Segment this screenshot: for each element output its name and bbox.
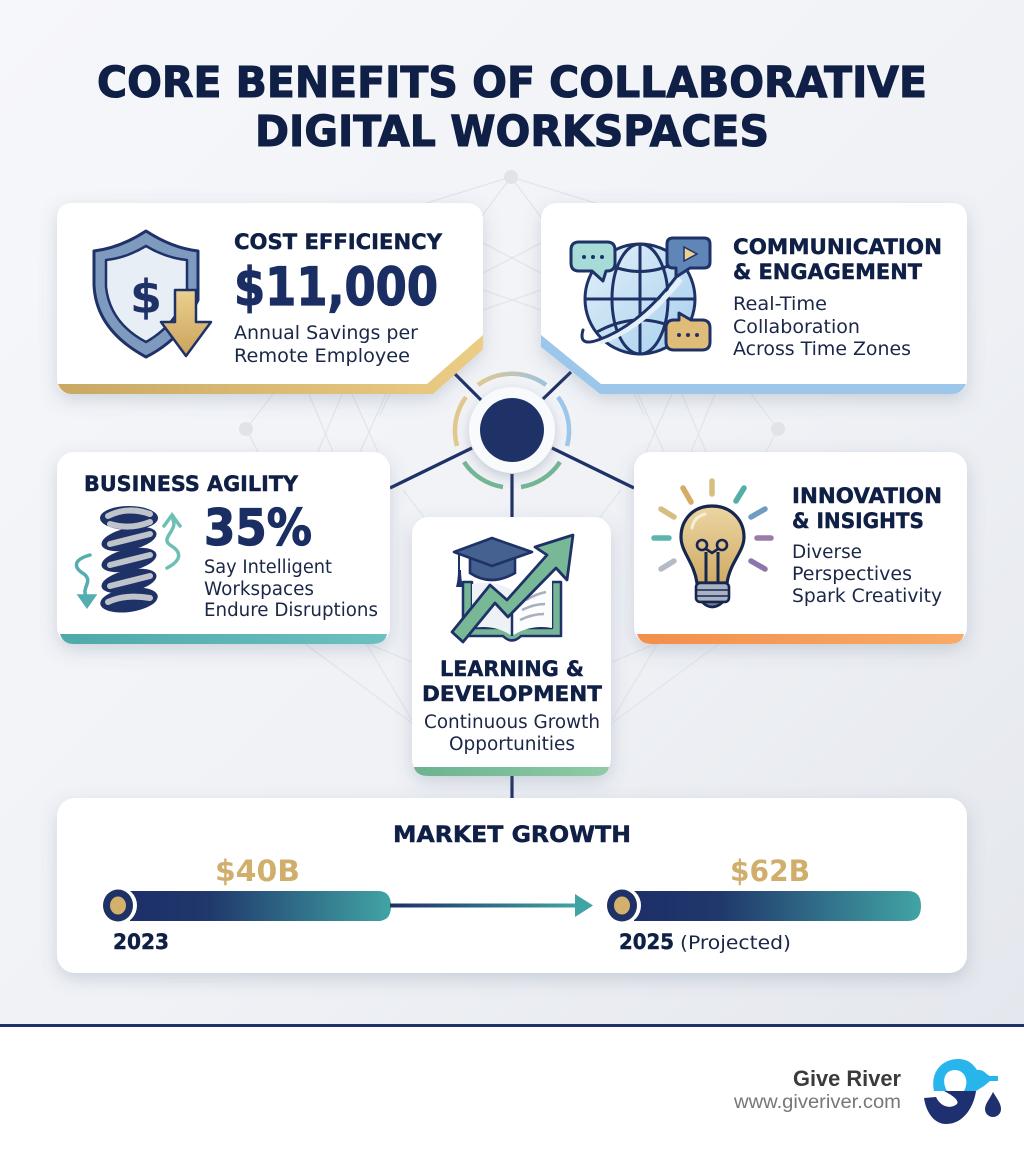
panel: communication and engagement	[541, 203, 967, 394]
heading: innovation and insights: INNOVATION	[792, 484, 942, 509]
panel: learning and development	[412, 517, 611, 776]
stat: $11,000: $11,000	[234, 257, 438, 318]
bar: 2025	[605, 887, 921, 924]
heading: communication and engagement: & ENGAGEMENT	[733, 260, 922, 285]
brand text: www.giveriver.com	[733, 1091, 901, 1113]
text: intelligent workspaces	[204, 557, 378, 621]
panel: cost efficiency	[57, 203, 483, 394]
central hub with spokes	[390, 372, 634, 798]
text: diverse perspectives: Spark Creativity	[792, 586, 942, 607]
heading: learning and development: LEARNING &	[440, 657, 584, 681]
title: DIGITAL WORKSPACES	[255, 107, 769, 157]
title	[97, 58, 927, 157]
heading: communication and engagement: COMMUNICATION	[733, 235, 942, 260]
panel: innovation and insights	[634, 452, 967, 644]
value: $62B: $62B	[730, 854, 810, 888]
footer	[0, 1024, 1024, 1154]
text: diverse perspectives: Diverse	[792, 542, 862, 563]
text: annual savings: Remote Employee	[234, 345, 410, 367]
text: intelligent workspaces: Endure Disruptions	[204, 600, 378, 621]
value: $40B: $40B	[215, 854, 300, 888]
text: real-time collaboration: Collaboration	[733, 316, 860, 338]
text: annual savings	[234, 322, 418, 367]
heading: learning and development	[422, 657, 603, 706]
text: intelligent workspaces: Say Intelligent	[204, 557, 332, 578]
text: diverse perspectives	[792, 542, 942, 607]
text: continuous growth: Continuous Growth	[424, 712, 600, 733]
panel: market growth	[57, 798, 967, 973]
icon: graduation cap, book and growth arrow	[452, 535, 573, 642]
heading: business agility: BUSINESS AGILITY	[84, 472, 299, 496]
brand text	[733, 1066, 901, 1113]
text: real-time collaboration	[733, 293, 911, 360]
text: real-time collaboration: Across Time Zones	[733, 338, 911, 360]
text: annual savings: Annual Savings per	[234, 322, 418, 344]
brand text: Give River	[793, 1066, 901, 1091]
stat: 35%: 35%	[204, 499, 312, 557]
icon: give river logo	[924, 1059, 1001, 1124]
text: continuous growth: Opportunities	[449, 734, 575, 755]
heading: innovation and insights	[792, 484, 942, 534]
heading: innovation and insights: & INSIGHTS	[792, 509, 924, 534]
icon: shield with dollar and down arrow	[94, 231, 211, 357]
panel: business agility	[57, 452, 390, 644]
heading: learning and development: DEVELOPMENT	[422, 682, 603, 706]
label: 2025 projected	[619, 930, 791, 954]
label: 2025 projected: 2025	[619, 930, 674, 954]
arrow: growth	[390, 894, 593, 917]
icon: shield with dollar and down arrow: $	[130, 270, 162, 324]
icon: teal flex arrows	[76, 515, 180, 606]
heading: market growth: MARKET GROWTH	[393, 823, 631, 848]
icon: spring	[99, 506, 159, 616]
text: intelligent workspaces: Workspaces	[204, 579, 314, 600]
heading: communication and engagement	[733, 235, 942, 285]
text: real-time collaboration: Real-Time	[733, 293, 827, 315]
heading: cost efficiency: COST EFFICIENCY	[234, 230, 443, 254]
text: continuous growth	[424, 712, 600, 755]
bar: 2023	[101, 887, 391, 924]
label: 2025 projected: (Projected)	[680, 932, 791, 954]
icon: globe with chat bubbles	[571, 238, 710, 354]
label: 2023: 2023	[113, 930, 169, 954]
title: CORE BENEFITS OF COLLABORATIVE	[97, 58, 927, 108]
icon: light bulb	[654, 481, 771, 607]
text: diverse perspectives: Perspectives	[792, 564, 912, 585]
